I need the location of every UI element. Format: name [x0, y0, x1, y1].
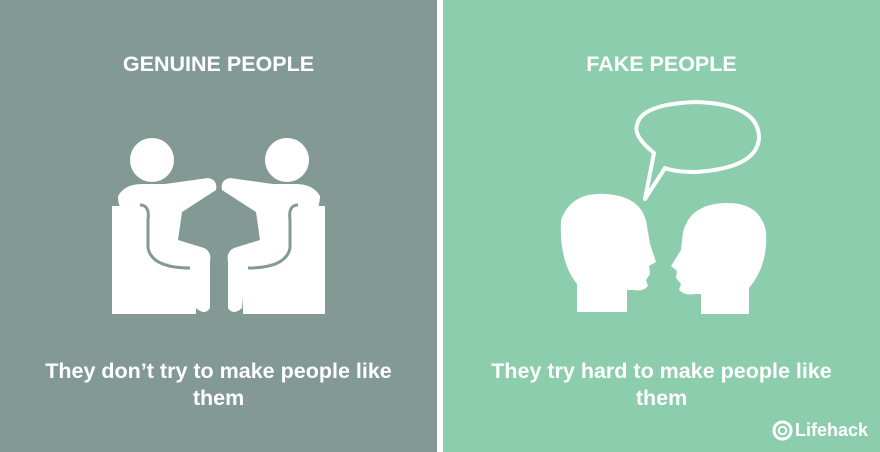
panel: genuine people	[0, 0, 437, 452]
logo: lifehack: Lifehack	[795, 420, 868, 440]
text: genuine caption	[45, 359, 392, 410]
text: genuine caption: They don’t try to make people like	[45, 359, 392, 383]
icon: two heads with speech bubble	[560, 100, 766, 314]
text: fake caption: them	[636, 386, 687, 410]
panel: fake people	[443, 0, 880, 452]
text: fake caption: They try hard to make people like	[491, 359, 832, 383]
text: fake caption	[491, 359, 832, 410]
icon: two people sitting	[112, 138, 325, 314]
text: genuine caption: them	[193, 386, 244, 410]
heading: fake people: FAKE PEOPLE	[586, 52, 737, 76]
heading: genuine people: GENUINE PEOPLE	[123, 52, 314, 76]
